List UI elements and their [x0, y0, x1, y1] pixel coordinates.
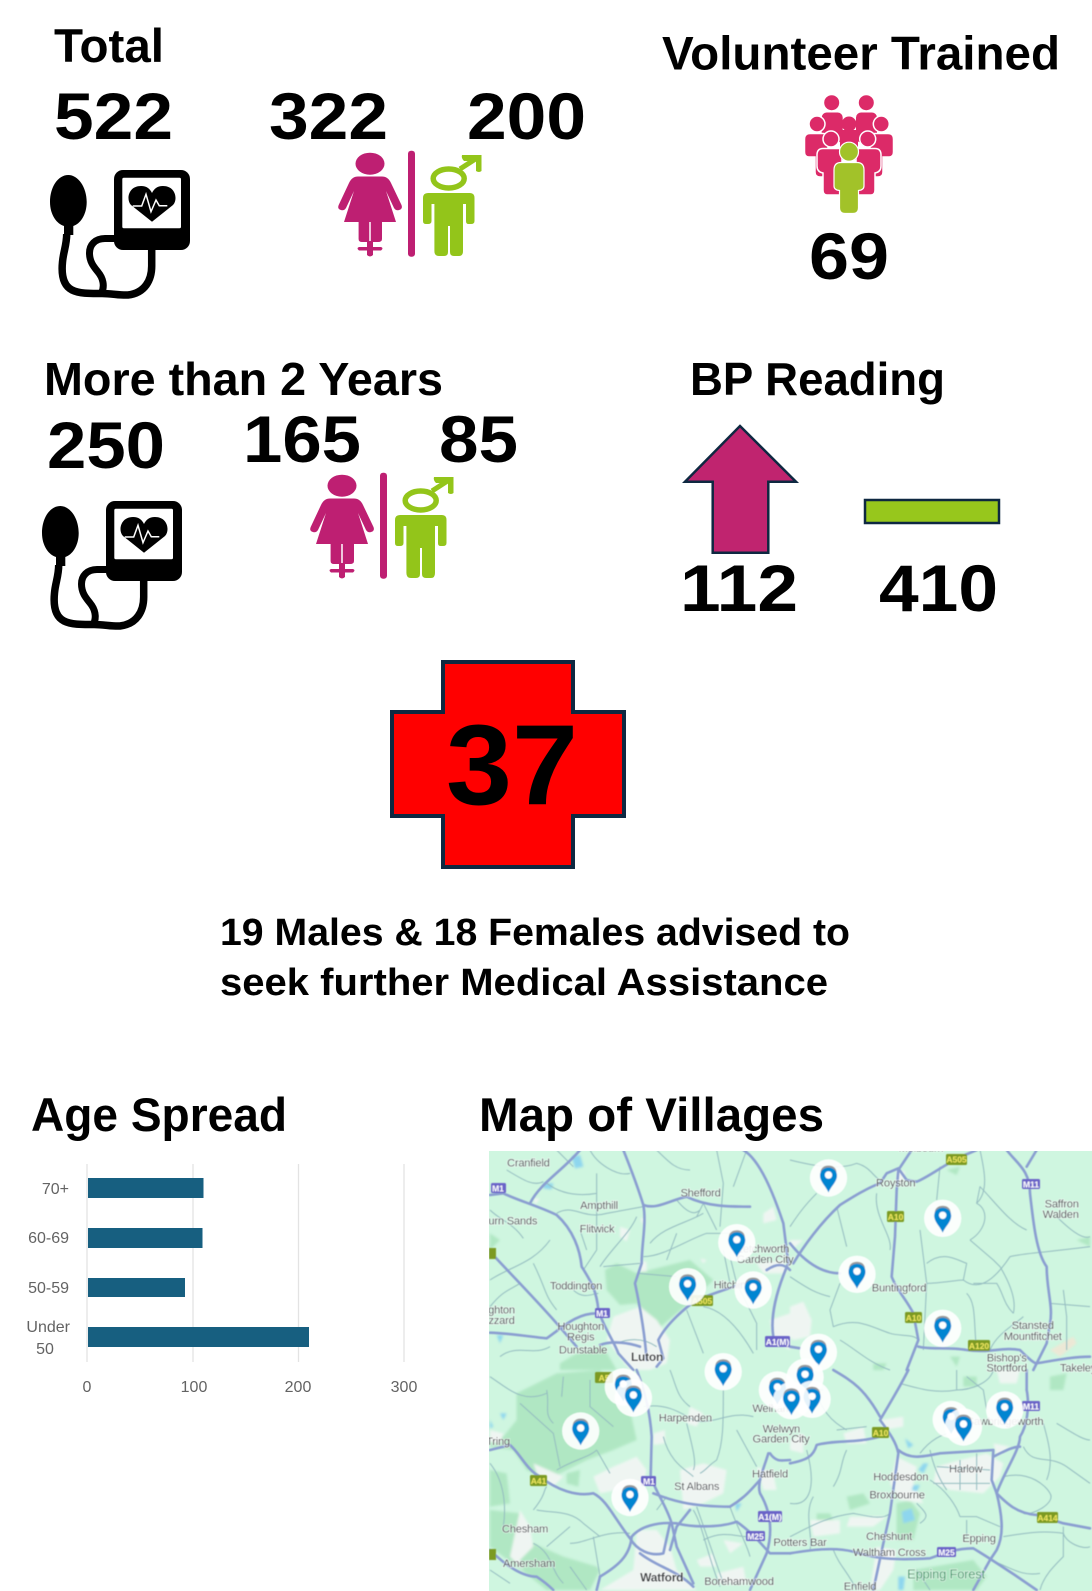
map place labels: Amersham: [503, 1558, 555, 1570]
map place labels: zzard: [488, 1315, 515, 1327]
map place labels: urn Sands: [488, 1215, 538, 1227]
map place labels: Dunstable: [559, 1344, 607, 1356]
map place labels: Regis: [567, 1332, 595, 1344]
number: total 522: 522: [54, 79, 173, 153]
map place labels: Luton: [631, 1350, 663, 1364]
heading: Total: Total: [54, 19, 164, 72]
map place labels: Stansted: [1012, 1320, 1054, 1332]
map place labels: Stortford: [986, 1362, 1027, 1374]
icon: normal readings bar: [865, 500, 999, 523]
map road shields: A10: [906, 1313, 922, 1323]
map road shields: A10: [888, 1212, 904, 1222]
map place labels: Royston: [876, 1178, 915, 1190]
number: more than 2 years 250: 250: [47, 408, 165, 482]
icon: blood pressure monitor: [42, 501, 182, 626]
map road shields: A5: [599, 1373, 610, 1383]
text: medical assistance advice: seek further Medical Assistance: [220, 962, 828, 1004]
map road shields: A505: [946, 1154, 967, 1164]
number: volunteers 69: 69: [809, 219, 889, 293]
map place labels: Bishop's: [987, 1353, 1027, 1365]
bar chart: age spread: 0: [83, 1379, 92, 1396]
map place labels: Watford: [640, 1571, 683, 1585]
bar chart: age spread: 200: [285, 1379, 311, 1396]
map place labels: Garden City: [737, 1254, 794, 1266]
map road shields: M1: [643, 1476, 655, 1486]
map place labels: [486, 1142, 1092, 1591]
map road shields: M1: [596, 1308, 608, 1318]
heading: Age Spread: Age Spread: [31, 1088, 287, 1141]
map road shields: A120: [969, 1341, 989, 1351]
map place labels: St Albans: [674, 1481, 720, 1493]
map place labels: ghton: [488, 1304, 515, 1316]
bar chart: age spread: 300: [391, 1379, 417, 1396]
map place labels: Shefford: [680, 1188, 721, 1200]
icon: red cross with 37: 37: [446, 702, 578, 829]
map road shields: A1(M): [766, 1337, 789, 1347]
number: total males 200: 200: [467, 79, 586, 153]
number: total females 322: 322: [269, 79, 388, 153]
bar chart: age spread: 60-69: [28, 1230, 69, 1247]
text: medical assistance advice: [220, 912, 850, 1004]
map place labels: Waltham Cross: [853, 1547, 926, 1559]
icon: female and male figures: [338, 151, 482, 257]
heading: Map of Villages: Map of Villages: [479, 1088, 824, 1141]
heading: Volunteer Trained: Volunteer Trained: [662, 26, 1060, 80]
map place labels: Tring: [486, 1436, 510, 1448]
map place labels: Melbourn: [899, 1142, 943, 1154]
map road shields: M1: [492, 1184, 504, 1194]
icon: red cross with 37: [392, 662, 624, 867]
map place labels: Chesham: [502, 1524, 548, 1536]
arrow: raised readings: [685, 426, 796, 553]
map road shields: A414: [1037, 1513, 1058, 1523]
bar chart: age spread: Under: [26, 1319, 71, 1336]
map road shields: M25: [747, 1532, 764, 1542]
map minor roads: [490, 1150, 1090, 1590]
map place labels: Ampthill: [580, 1200, 618, 1212]
map place labels: Letchworth: [737, 1244, 789, 1256]
heading: BP Reading: BP Reading: [690, 353, 945, 405]
map place labels: Hitchin: [714, 1279, 746, 1291]
heading: More than 2 Years: More than 2 Years: [44, 353, 443, 405]
map place labels: Epping: [962, 1533, 996, 1545]
map road shields: [489, 1154, 1058, 1560]
map place labels: Buntingford: [872, 1283, 926, 1295]
number: more than 2 years females 165: 165: [243, 402, 361, 476]
map place labels: Borehamwood: [704, 1576, 774, 1588]
map location pins: [562, 1159, 1023, 1516]
number: raised 112: 112: [680, 551, 798, 625]
map road shields: A505: [692, 1296, 712, 1306]
map road shields: M11: [1023, 1402, 1039, 1412]
map road shields: A1(M): [758, 1512, 782, 1522]
map place labels: Mountfitchet: [1004, 1331, 1063, 1343]
text: medical assistance advice: 19 Males & 18 Females advised to: [220, 912, 850, 954]
map place labels: Toddington: [550, 1280, 602, 1292]
map road shields: M25: [938, 1548, 955, 1558]
map of villages: [486, 1142, 1092, 1591]
bar chart: age spread: 70+: [42, 1181, 69, 1198]
icon: female and male figures: [310, 473, 454, 579]
map place labels: Epping Forest: [907, 1566, 985, 1581]
map place labels: Saffron: [1045, 1198, 1079, 1210]
bar chart: age spread: 100: [181, 1379, 207, 1396]
map place labels: Broxbourne: [869, 1490, 925, 1502]
bar chart: age spread: [26, 1164, 417, 1396]
map main roads: [490, 1150, 1090, 1590]
bar chart: age spread: 50: [36, 1341, 54, 1358]
bar chart: age spread: 50-59: [28, 1280, 69, 1297]
icon: group of volunteers: [804, 95, 894, 214]
map place labels: Harlow: [949, 1464, 984, 1476]
map place labels: Harpenden: [659, 1413, 712, 1425]
number: more than 2 years males 85: 85: [439, 402, 518, 476]
number: normal 410: 410: [879, 551, 998, 625]
map place labels: Walden: [1043, 1209, 1079, 1221]
map place labels: Welham: [752, 1403, 792, 1415]
map place labels: Hoddesdon: [873, 1472, 928, 1484]
map road shields: M11: [1023, 1180, 1039, 1190]
map place labels: Potters Bar: [773, 1537, 827, 1549]
map place labels: Garden City: [753, 1434, 810, 1446]
map place labels: Cheshunt: [866, 1531, 913, 1543]
map place labels: Flitwick: [580, 1223, 615, 1235]
map place labels: Houghton: [557, 1321, 604, 1333]
map place labels: Sawbridgeworth: [967, 1416, 1043, 1428]
map road shields: A10: [873, 1428, 889, 1438]
map road shields: A41: [531, 1476, 547, 1486]
icon: blood pressure monitor: [50, 170, 190, 295]
map place labels: Cranfield: [507, 1158, 550, 1170]
map place labels: Welwyn: [763, 1423, 800, 1435]
map place labels: Hatfield: [752, 1468, 788, 1480]
